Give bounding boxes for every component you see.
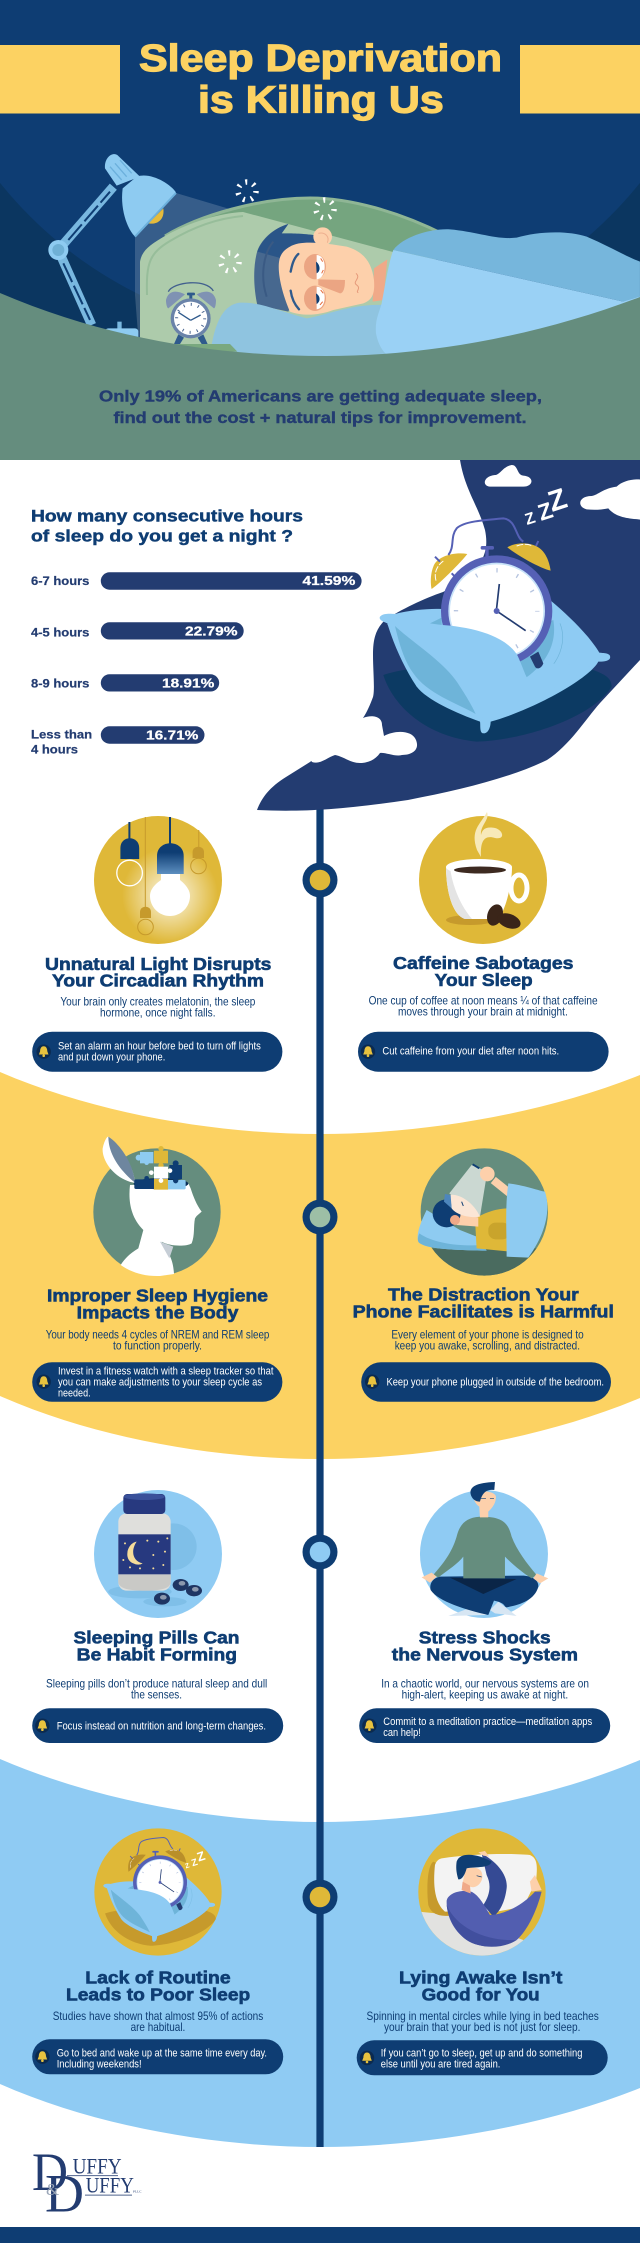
bar: 6-7 hours bbox=[31, 572, 362, 590]
heading bbox=[392, 1627, 578, 1664]
body text bbox=[60, 996, 255, 1019]
illustration: sleepless man bbox=[210, 224, 640, 357]
heading: Caffeine Sabotages bbox=[393, 953, 574, 973]
hero banner: left yellow block bbox=[0, 45, 120, 114]
body text: One cup of coffee at noon means ¼ of that caffeine bbox=[369, 995, 598, 1008]
tip pill: If you can’t go to sleep, get up and do something bbox=[381, 2047, 582, 2059]
icon: pillow and clock bbox=[94, 1828, 222, 1956]
question heading: of sleep do you get a night ? bbox=[31, 528, 293, 546]
tip pill: Including weekends! bbox=[57, 2058, 142, 2070]
body text bbox=[366, 2010, 599, 2034]
panel: lying awake bbox=[357, 1828, 608, 2075]
heading: Improper Sleep Hygiene bbox=[47, 1286, 268, 1306]
tip pill bbox=[32, 1032, 282, 1072]
illustration: pillow and alarm clock bbox=[380, 518, 612, 742]
bar: 6-7 hours: 6-7 hours bbox=[31, 576, 89, 588]
body text: Your body needs 4 cycles of NREM and REM sleep bbox=[46, 1329, 269, 1342]
panel: caffeine bbox=[358, 812, 609, 1072]
body text: Every element of your phone is designed to bbox=[391, 1329, 584, 1342]
timeline marker 1 bbox=[302, 862, 338, 898]
heading bbox=[353, 1285, 614, 1322]
tip pill: Keep your phone plugged in outside of the bedroom. bbox=[386, 1377, 604, 1389]
title: is Killing Us bbox=[198, 80, 444, 122]
bar: 8-9 hours: 8-9 hours bbox=[31, 679, 89, 691]
tip pill: needed. bbox=[58, 1387, 91, 1399]
heading bbox=[45, 954, 272, 991]
hero: green mound bbox=[0, 293, 640, 460]
panel: unnatural light bbox=[32, 816, 282, 1072]
tip pill bbox=[32, 2039, 283, 2074]
heading: Good for You bbox=[422, 1985, 540, 2005]
heading: The Distraction Your bbox=[388, 1285, 579, 1305]
heading: the Nervous System bbox=[392, 1644, 578, 1664]
tip pill: and put down your phone. bbox=[58, 1051, 165, 1063]
logo: Duffy & Duffy: PLLC bbox=[133, 2190, 142, 2194]
panel: phone distraction bbox=[353, 1148, 614, 1402]
bar: less than 4 hours: 16.71% bbox=[146, 727, 199, 742]
icon: pillow and clock: Z bbox=[184, 1862, 190, 1870]
heading: Leads to Poor Sleep bbox=[66, 1984, 250, 2004]
tip pill bbox=[32, 1362, 282, 1402]
body text bbox=[391, 1329, 584, 1353]
icon: pillow and clock: Z bbox=[190, 1857, 199, 1869]
panel: sleep hygiene bbox=[32, 1137, 282, 1402]
bar: less than 4 hours bbox=[31, 726, 204, 757]
zzz: Z bbox=[523, 510, 538, 529]
body text bbox=[381, 1677, 589, 1701]
body text bbox=[46, 1329, 269, 1353]
bar: less than 4 hours: Less than bbox=[31, 730, 92, 742]
tip pill: else until you are tired again. bbox=[381, 2058, 500, 2070]
illustration: desk lamp bbox=[48, 154, 176, 342]
body text bbox=[369, 995, 598, 1019]
heading: Your Circadian Rhythm bbox=[52, 971, 264, 991]
logo: Duffy & Duffy: D bbox=[45, 2164, 84, 2224]
logo: Duffy & Duffy: UFFY bbox=[86, 2173, 134, 2198]
footer bar bbox=[0, 2227, 640, 2243]
timeline marker 4 bbox=[302, 1880, 338, 1914]
heading bbox=[399, 1968, 563, 2005]
logo: Duffy & Duffy: D bbox=[32, 2142, 68, 2202]
tip pill bbox=[32, 1708, 283, 1743]
heading bbox=[47, 1286, 268, 1323]
tip pill: you can make adjustments to your sleep cycle as bbox=[58, 1376, 262, 1388]
bar: less than 4 hours: 4 hours bbox=[31, 745, 78, 757]
illustration: sparkles bbox=[221, 182, 334, 271]
body text: high-alert, keeping us awake at night. bbox=[402, 1688, 568, 1701]
heading: Impacts the Body bbox=[77, 1303, 239, 1323]
icon: meditating man bbox=[420, 1482, 548, 1618]
body text: Spinning in mental circles while lying in bed teaches bbox=[366, 2010, 599, 2023]
bar: 4-5 hours: 22.79% bbox=[185, 623, 238, 638]
hero: subtitle: find out the cost + natural tips for improvement. bbox=[114, 410, 526, 427]
hero: subtitle: Only 19% of Americans are getting adequate sleep, bbox=[99, 389, 542, 406]
panel: stress bbox=[359, 1482, 610, 1743]
body text: Sleeping pills don’t produce natural sleep and dull bbox=[46, 1677, 267, 1690]
tip pill bbox=[357, 2040, 608, 2075]
body text: moves through your brain at midnight. bbox=[398, 1006, 568, 1019]
logo: Duffy & Duffy: & bbox=[46, 2180, 59, 2199]
hero banner: right yellow block bbox=[520, 45, 640, 114]
night sky shape bbox=[257, 460, 640, 811]
panel: sleeping pills bbox=[32, 1490, 283, 1743]
question heading: How many consecutive hours bbox=[31, 508, 303, 526]
heading: Sleeping Pills Can bbox=[74, 1627, 240, 1647]
title: Sleep Deprivation bbox=[139, 38, 502, 80]
tip pill bbox=[359, 1708, 610, 1743]
timeline marker 2 bbox=[302, 1200, 338, 1234]
icon: light bulbs bbox=[94, 816, 222, 944]
icon: coffee cup bbox=[419, 812, 547, 944]
heading: Your Sleep bbox=[435, 970, 533, 990]
body text: your brain that your bed is not just for sleep. bbox=[384, 2021, 580, 2034]
icon: person with phone in bed bbox=[418, 1148, 550, 1278]
logo: Duffy & Duffy bbox=[32, 2142, 142, 2224]
panel: blue band bbox=[0, 1759, 640, 2147]
body text: are habitual. bbox=[131, 2021, 185, 2034]
heading: Be Habit Forming bbox=[77, 1644, 237, 1664]
panel: hero bbox=[0, 0, 640, 460]
icon: person hugging pillow bbox=[418, 1828, 546, 1958]
tip pill: Invest in a fitness watch with a sleep tracker so that bbox=[58, 1365, 274, 1377]
logo: Duffy & Duffy: UFFY bbox=[73, 2153, 122, 2178]
tip pill: can help! bbox=[383, 1727, 421, 1739]
body text: In a chaotic world, our nervous systems are on bbox=[381, 1677, 589, 1690]
illustration: alarm clock on nightstand bbox=[166, 283, 237, 352]
zzz: Z bbox=[544, 483, 571, 519]
heading: Phone Facilitates is Harmful bbox=[353, 1302, 614, 1322]
body text: Your brain only creates melatonin, the sleep bbox=[60, 996, 255, 1009]
heading: Unnatural Light Disrupts bbox=[45, 954, 272, 974]
bar: 8-9 hours: 18.91% bbox=[162, 676, 215, 691]
zzz bbox=[523, 483, 571, 529]
tip pill bbox=[361, 1362, 611, 1402]
bar: 4-5 hours: 4-5 hours bbox=[31, 627, 89, 639]
zzz: Z bbox=[535, 497, 556, 526]
bar: 6-7 hours: 41.59% bbox=[302, 573, 356, 588]
icon: pill bottle bbox=[94, 1490, 222, 1618]
timeline marker 3 bbox=[302, 1534, 338, 1570]
icon: open head with puzzle bbox=[93, 1137, 221, 1276]
heading bbox=[74, 1627, 240, 1664]
panel: survey chart bbox=[31, 460, 640, 811]
tip pill bbox=[358, 1032, 609, 1072]
illustration: lamp light beam bbox=[135, 193, 393, 360]
body text bbox=[46, 1677, 267, 1701]
icon: pillow and clock: Z bbox=[195, 1849, 207, 1865]
heading bbox=[393, 953, 574, 990]
timeline line bbox=[316, 805, 324, 2147]
heading: Stress Shocks bbox=[419, 1627, 551, 1647]
tip pill: Cut caffeine from your diet after noon hits. bbox=[382, 1045, 559, 1057]
tip pill: Go to bed and wake up at the same time every day. bbox=[57, 2047, 267, 2059]
heading bbox=[66, 1967, 250, 2004]
body text bbox=[53, 2010, 263, 2034]
tip pill: Commit to a meditation practice—meditation apps bbox=[383, 1716, 593, 1728]
heading: Lack of Routine bbox=[85, 1967, 231, 1987]
illustration: headboard bbox=[140, 198, 445, 365]
bar: 8-9 hours bbox=[31, 674, 219, 692]
hero: subtitle bbox=[99, 389, 542, 427]
body text: hormone, once night falls. bbox=[100, 1006, 216, 1019]
body text: Studies have shown that almost 95% of actions bbox=[53, 2010, 263, 2023]
tip pill: Focus instead on nutrition and long-term changes. bbox=[57, 1721, 266, 1733]
panel: lack of routine bbox=[32, 1828, 283, 2074]
heading: Lying Awake Isn’t bbox=[399, 1968, 563, 1988]
body text: the senses. bbox=[131, 1688, 182, 1701]
body text: to function properly. bbox=[113, 1340, 202, 1353]
title bbox=[139, 38, 502, 122]
body text: keep you awake, scrolling, and distracted. bbox=[395, 1340, 580, 1353]
question heading bbox=[31, 508, 303, 546]
panel: yellow band bbox=[0, 1072, 640, 1459]
bar: 4-5 hours bbox=[31, 622, 244, 640]
tip pill: Set an alarm an hour before bed to turn off lights bbox=[58, 1040, 261, 1052]
